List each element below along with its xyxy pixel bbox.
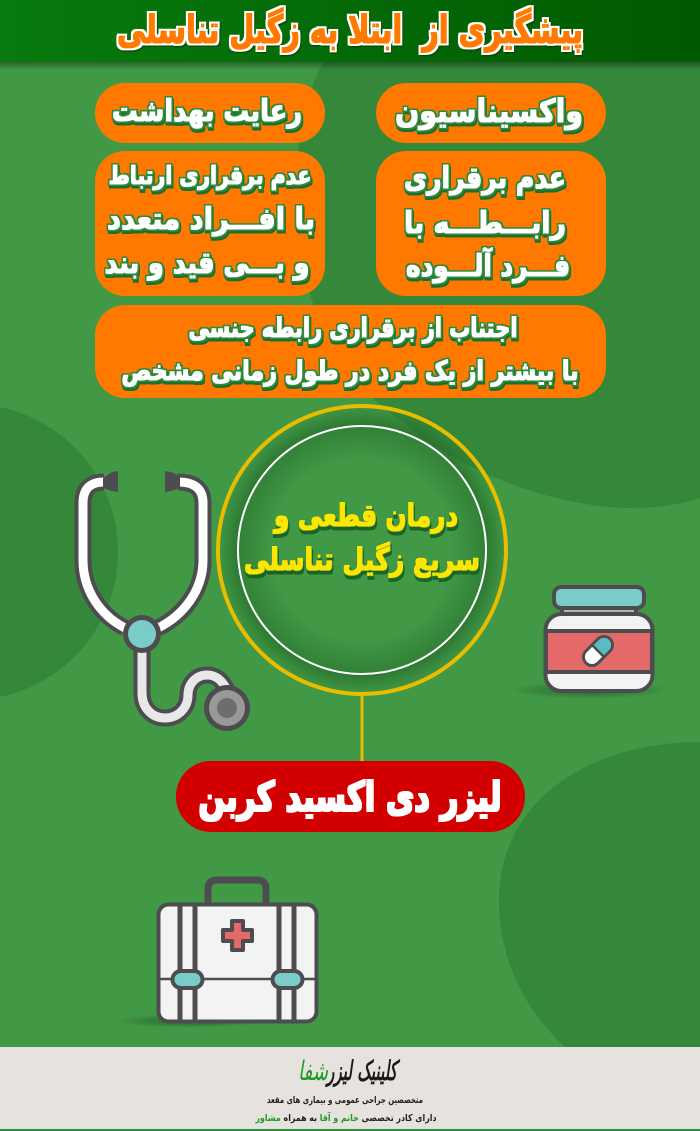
circle: treatment heading: سریع زگیل تناسلی <box>244 541 480 578</box>
panel: no contact with infected person: فـــرد آلـــوده <box>406 247 570 284</box>
clinic logo: کلینیک لیزر <box>325 1056 400 1088</box>
panel: vaccination: واکسیناسیون <box>395 92 583 130</box>
staff line: دارای کادر تخصصی خانم و آقا به همراه مشاور <box>255 1111 437 1124</box>
icon: stethoscope <box>83 471 250 731</box>
header bar <box>0 0 700 70</box>
panel: avoid multiple partners over time: با بیشتر از یک فرد در طول زمانی مشخص <box>122 356 578 387</box>
panel: hygiene: رعایت بهداشت <box>112 94 302 129</box>
panel: no multiple partners: با افـــراد متعدد <box>107 202 315 237</box>
panel: avoid multiple partners over time: اجتناب از برقراری رابطه جنسی <box>188 313 518 344</box>
circle: treatment heading <box>217 405 507 695</box>
clinic logo <box>298 1056 400 1088</box>
panel: no multiple partners: و بـــی قید و بند <box>104 246 310 281</box>
circle: treatment heading: درمان قطعی و <box>272 498 458 534</box>
specialty line: متخصصین جراحی عمومی و بیماری های مقعد <box>267 1095 423 1106</box>
footer <box>0 1047 700 1131</box>
panel: vaccination <box>376 83 606 143</box>
badge: CO2 laser: لیزر دی اکسید کربن <box>198 773 502 821</box>
icon: pill jar <box>510 587 670 699</box>
panel: no contact with infected person: عدم برقراری <box>404 161 566 196</box>
clinic logo: شفا <box>298 1056 328 1087</box>
panel: hygiene <box>95 83 325 143</box>
badge: CO2 laser <box>176 761 525 832</box>
panel: no multiple partners <box>95 151 325 296</box>
connector line <box>360 695 364 763</box>
panel: no contact with infected person <box>376 151 606 296</box>
icon: first aid kit <box>115 880 316 1028</box>
panel: avoid multiple partners over time <box>95 305 606 398</box>
panel: no contact with infected person: رابـــطـــه با <box>404 206 566 241</box>
panel: no multiple partners: عدم برقراری ارتباط <box>108 161 312 191</box>
